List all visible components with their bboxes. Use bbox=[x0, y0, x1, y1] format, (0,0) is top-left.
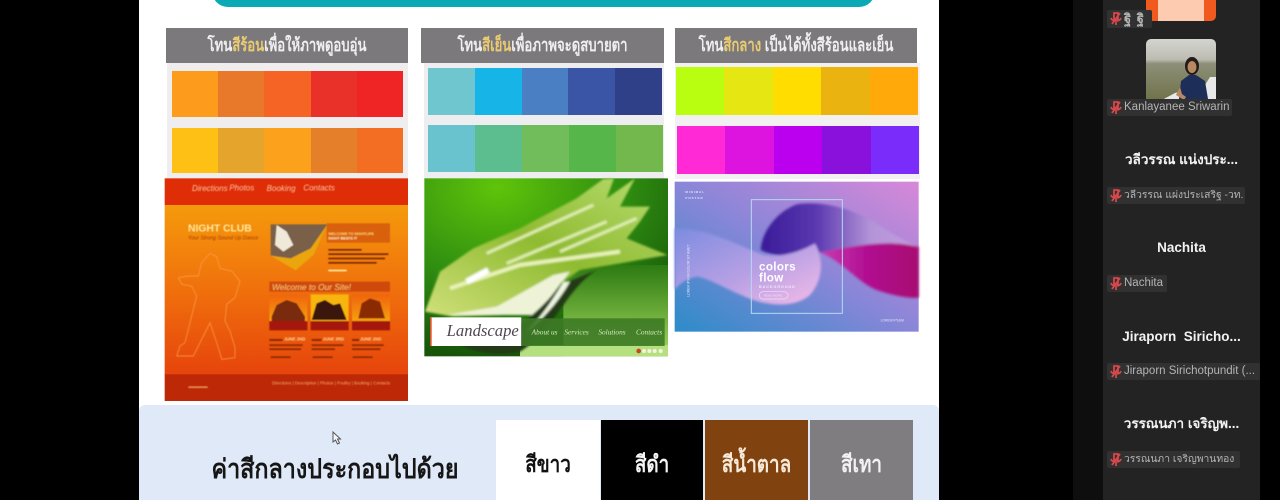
participant label: Jiraporn bbox=[1107, 363, 1260, 380]
example: night club website: Welcome to Our Site! bbox=[272, 282, 352, 292]
participant label: Wannapha: วรรณนภา เจริญพานทอง bbox=[1124, 454, 1234, 465]
participant name: Nachita: Nachita bbox=[1157, 240, 1206, 255]
example: green landscape website bbox=[424, 177, 668, 356]
swatch: brown: สีน้ำตาล bbox=[722, 451, 791, 477]
participant name: Waliwan: วลีวรรณ แน่งประ... bbox=[1125, 152, 1238, 167]
example: night club website: NIGHT BEATS IT bbox=[328, 237, 358, 241]
example: colors flow poster: READ MORE bbox=[764, 294, 782, 298]
example: night club website: JUNE 3RD bbox=[323, 336, 344, 341]
slide background bbox=[139, 0, 939, 500]
neutral colours heading: ค่าสีกลางประกอบไปด้วย bbox=[211, 454, 459, 484]
cool palette backing bbox=[424, 63, 664, 179]
panel: warm tones heading: โทนสีร้อนเพื่อให้ภาพดูอบอุ่น bbox=[208, 35, 366, 55]
example: colors flow poster: LOREM IPSUM DOLOR SIT AMET bbox=[686, 245, 690, 297]
participant label: Waliwan: วลีวรรณ แผ่งประเสริฐ -วท. bbox=[1124, 190, 1243, 201]
participant avatar: orange bbox=[1146, 0, 1216, 21]
example: colors flow poster: flow bbox=[759, 272, 784, 285]
panel: neutral tones heading: โทนสีกลาง เป็นได้ทั้งสีร้อนและเย็น bbox=[699, 35, 893, 55]
participant label: Waliwan bbox=[1107, 187, 1245, 204]
example: green landscape website: About us bbox=[531, 327, 558, 336]
participant name: Wannapha: วรรณนภา เจริญพ... bbox=[1124, 416, 1239, 431]
cool swatches row 1 bbox=[428, 68, 662, 115]
example: green landscape website: Services bbox=[564, 327, 589, 336]
participant label: Wannapha bbox=[1107, 451, 1240, 468]
panel: cool tones heading: โทนสีเย็นเพื่อภาพจะดูสบายตา bbox=[457, 35, 628, 55]
panel: video call participants bbox=[1103, 0, 1260, 500]
example: colors flow poster: colors bbox=[759, 260, 796, 273]
neutral palette backing bbox=[675, 63, 920, 179]
title bar bbox=[212, 0, 875, 7]
swatch: grey: สีเทา bbox=[841, 451, 882, 477]
panel: cool tones heading bbox=[421, 28, 664, 63]
participant photo: Kanlayanee bbox=[1146, 39, 1216, 99]
participant label: first: ฐิ ฐิ bbox=[1124, 11, 1145, 26]
example: colors flow poster: BACKGROUND bbox=[759, 285, 796, 289]
example: colors flow poster bbox=[673, 182, 921, 332]
swatch: black bbox=[601, 420, 703, 500]
warm swatches row 2 bbox=[172, 128, 403, 173]
participant label: Kanlayanee bbox=[1107, 99, 1232, 116]
example: night club website: NIGHT CLUB bbox=[188, 224, 252, 235]
swatch: black: สีดำ bbox=[635, 451, 669, 477]
participant label: first bbox=[1107, 10, 1152, 28]
example: green landscape website: Landscape bbox=[446, 321, 519, 340]
participant label: Nachita: Nachita bbox=[1124, 277, 1163, 289]
sidebar gutter bbox=[1073, 0, 1103, 500]
participant label: Kanlayanee: Kanlayanee Sriwarin bbox=[1124, 101, 1229, 113]
example: colors flow poster: POSTER bbox=[685, 196, 704, 200]
example: night club website: JUNE 2ND bbox=[360, 336, 381, 341]
cool swatches row 2 bbox=[428, 125, 663, 172]
example: night club website: Booking bbox=[267, 184, 296, 193]
example: night club website bbox=[164, 178, 408, 401]
swatch: white bbox=[496, 420, 600, 500]
participant label: Jiraporn: Jiraporn Sirichotpundit (... bbox=[1124, 365, 1255, 377]
example: colors flow poster: LOREM IPSUM bbox=[881, 318, 904, 322]
warm palette backing bbox=[167, 63, 408, 179]
panel: neutral colours strip bbox=[139, 405, 939, 500]
icon: mouse cursor bbox=[332, 431, 342, 445]
example: green landscape website: Contacts bbox=[636, 327, 662, 336]
example: colors flow poster: MINIMAL bbox=[685, 190, 705, 194]
participant name: Jiraporn: Jiraporn Siricho... bbox=[1122, 329, 1241, 344]
neutral swatches row 2 bbox=[677, 126, 919, 174]
swatch: white: สีขาว bbox=[525, 451, 571, 477]
example: night club website: Directions bbox=[192, 184, 228, 193]
swatch: brown bbox=[705, 420, 808, 500]
example: night club website: JUNE 2ND bbox=[284, 336, 305, 341]
example: night club website: Photos bbox=[229, 183, 254, 192]
panel: warm tones heading bbox=[166, 28, 408, 63]
example: green landscape website: Solutions bbox=[598, 327, 626, 336]
example: night club website: Your Strong Sound Up Dance bbox=[188, 236, 258, 242]
neutral swatches row 1 bbox=[676, 67, 918, 115]
example: night club website: Directions | Description | Photos | Poultry | Booking | Contacts bbox=[272, 380, 390, 385]
warm swatches row 1 bbox=[172, 71, 403, 117]
participant label: Nachita bbox=[1107, 275, 1167, 292]
example: night club website: WELCOME TO NIGHTLIFE bbox=[328, 232, 374, 236]
swatch: grey bbox=[810, 420, 913, 500]
example: night club website: Contacts bbox=[303, 183, 335, 192]
panel: neutral tones heading bbox=[675, 28, 917, 63]
